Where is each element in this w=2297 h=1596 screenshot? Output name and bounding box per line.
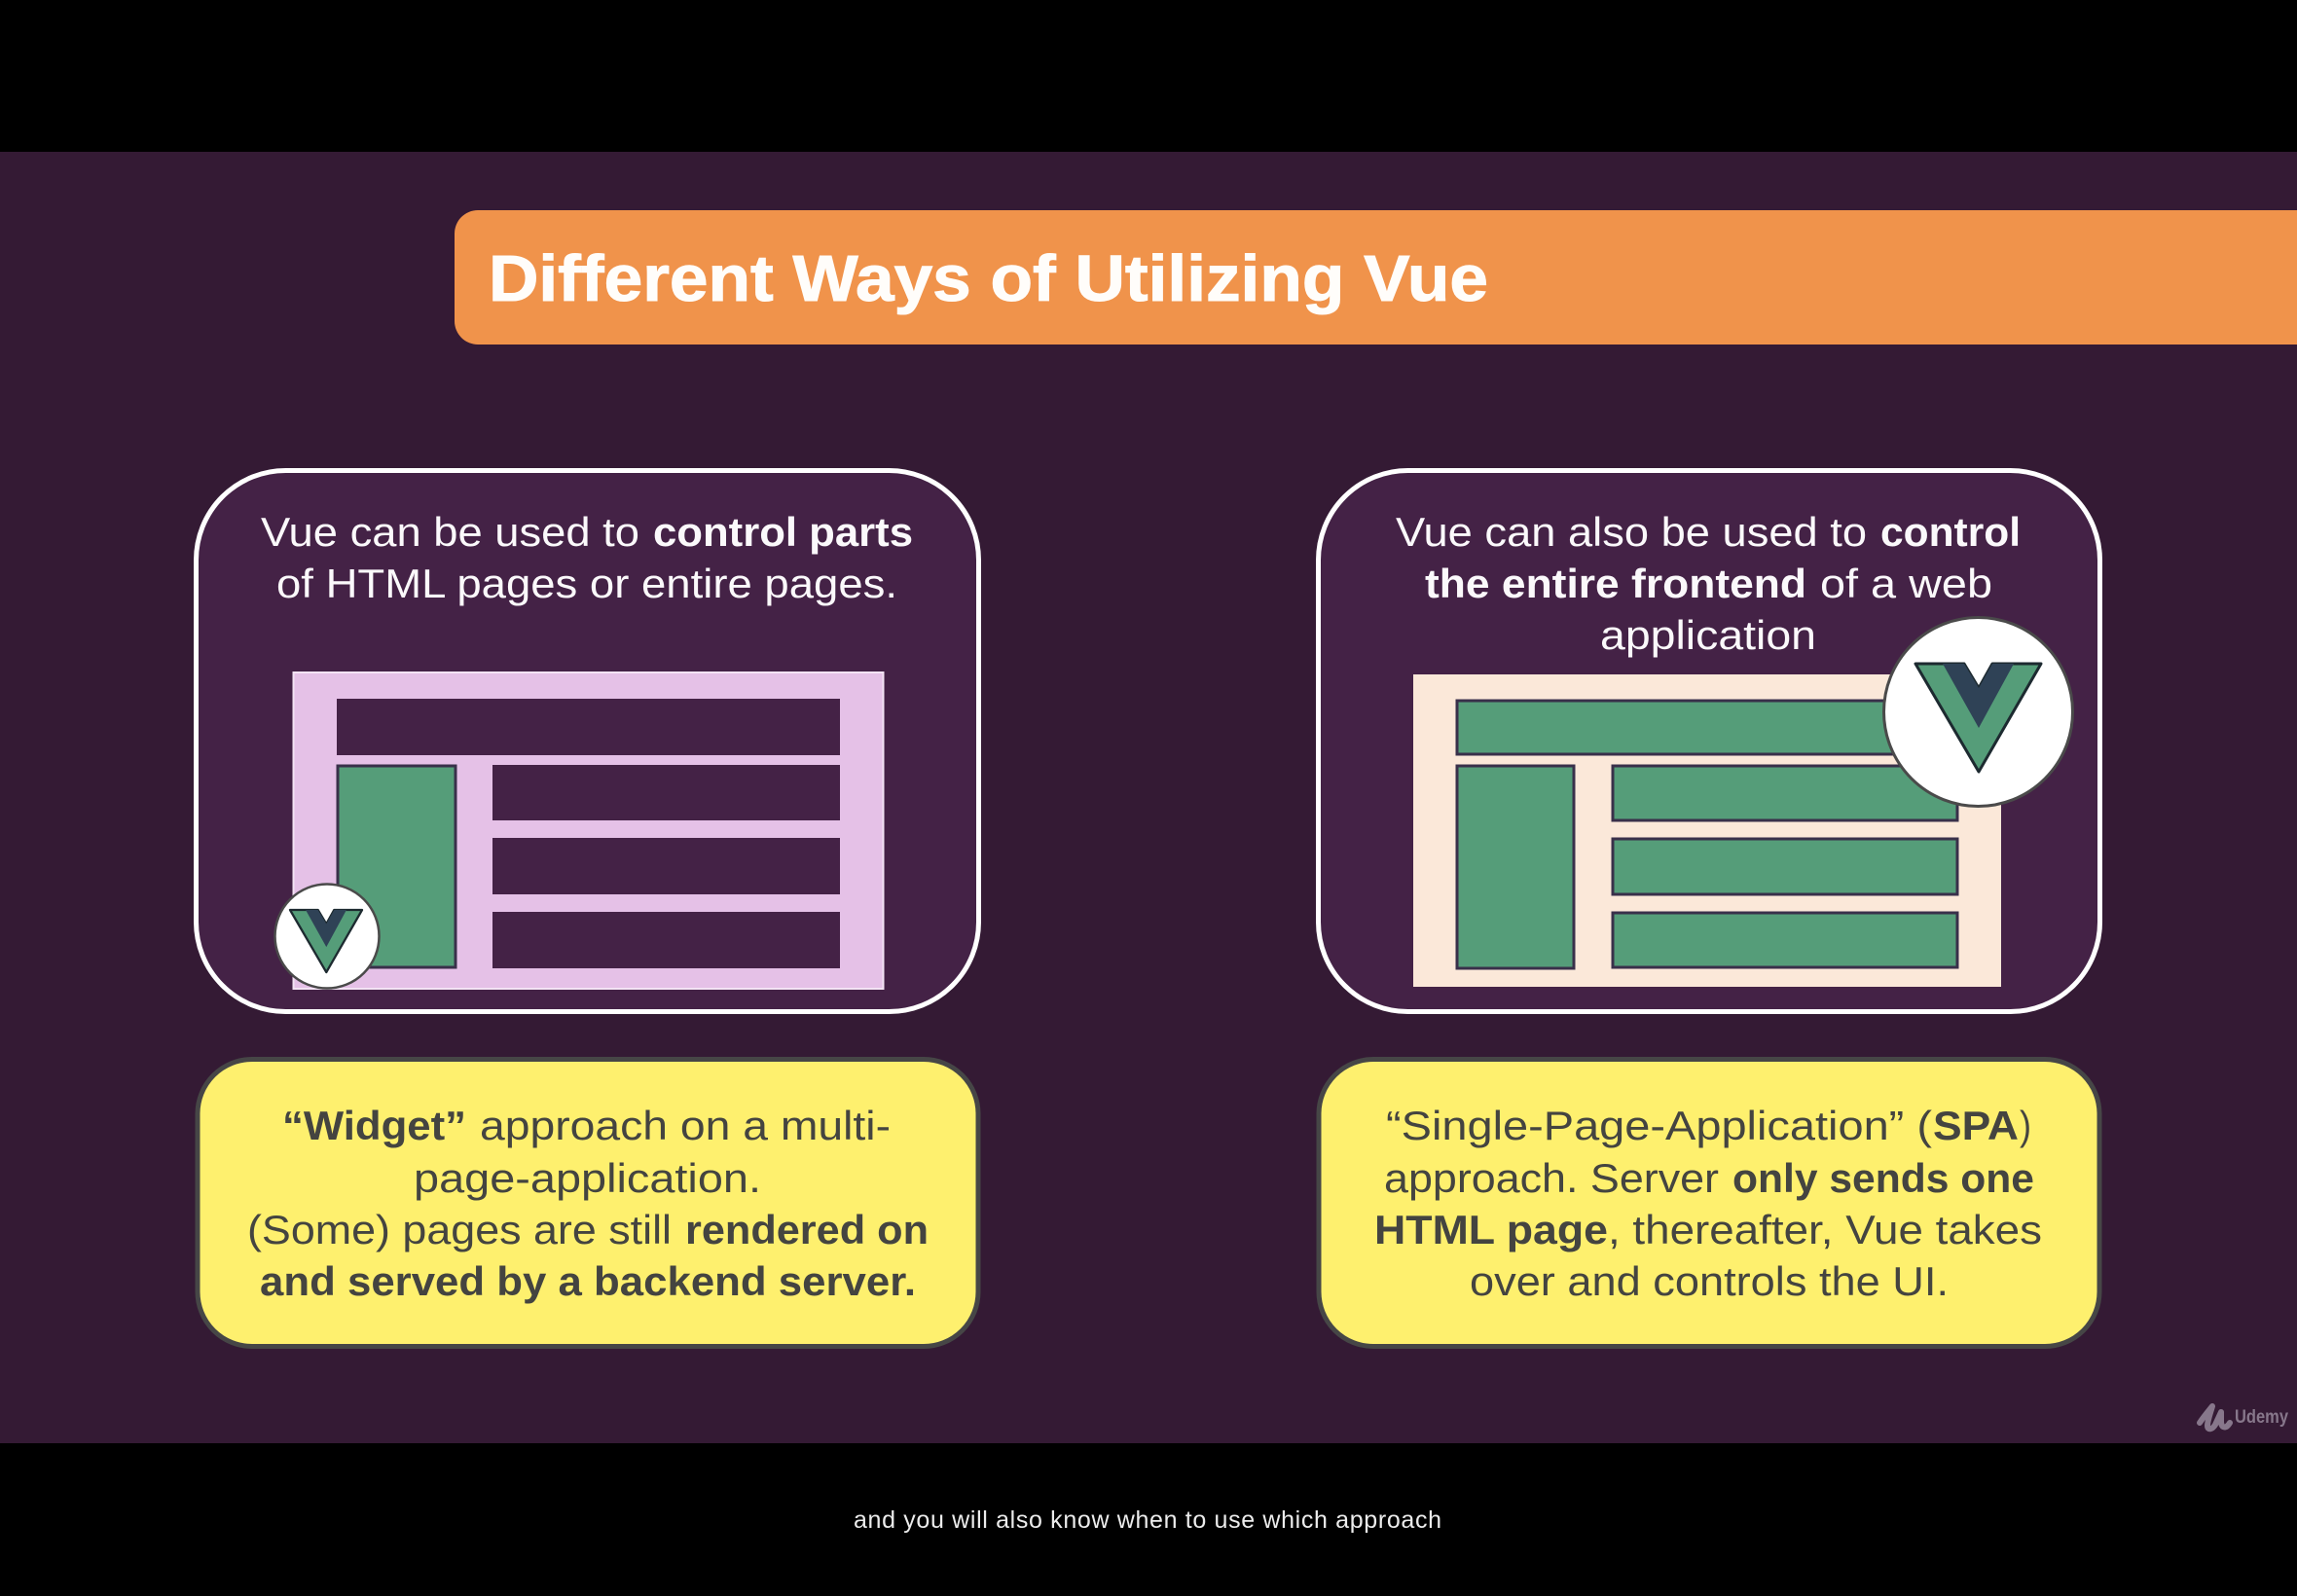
callout text: spa: over and controls the UI. [1470,1258,1949,1304]
page wireframe: partial control [294,672,884,989]
callout text: widget: “Widget” [282,1103,466,1148]
callout text: widget: and served by a backend server. [260,1258,916,1304]
panel text: control parts: control parts [653,509,913,555]
callout text: spa: , thereafter, Vue takes [1608,1207,2042,1252]
callout: spa approach [1319,1059,2099,1347]
callout: widget approach [198,1059,978,1347]
callout text: widget: (Some) pages are still [247,1207,672,1252]
udemy watermark [2200,1406,2288,1429]
panel text: control parts: Vue can be used to [261,509,639,555]
panel text: entire frontend: of a web [1820,561,1992,606]
callout text: spa: HTML page [1374,1207,1608,1252]
callout text: widget: page-application. [414,1155,761,1201]
panel: spa approach [1318,471,2100,1012]
title banner [455,210,2297,345]
callout text: widget: approach on a multi- [480,1103,891,1148]
panel text: control parts: of HTML pages or entire pages. [276,561,897,606]
panel text: entire frontend: Vue can also be used to [1396,509,1867,555]
page wireframe: full control [1413,674,2001,987]
panel text: entire frontend: application [1600,612,1816,658]
caption: and you will also know when to use which approach [854,1506,1441,1534]
callout text: spa: ) [2020,1103,2031,1148]
panel: widget approach [197,471,979,1012]
callout text: spa: SPA [1933,1103,2019,1148]
icon: large vue badge [1884,617,2073,806]
panel text: entire frontend: control [1880,509,2021,555]
icon: small vue badge [274,884,380,989]
callout text: spa: approach. Server [1384,1155,1719,1201]
udemy watermark: Udemy [2235,1407,2288,1428]
title: Different Ways of Utilizing Vue [489,242,1488,315]
widget sidebar [338,766,456,967]
callout text: widget: rendered on [685,1207,929,1252]
callout text: spa: “Single-Page-Application” ( [1386,1103,1932,1148]
callout text: spa: only sends one [1732,1155,2034,1201]
panel text: entire frontend: the entire frontend [1425,561,1806,606]
